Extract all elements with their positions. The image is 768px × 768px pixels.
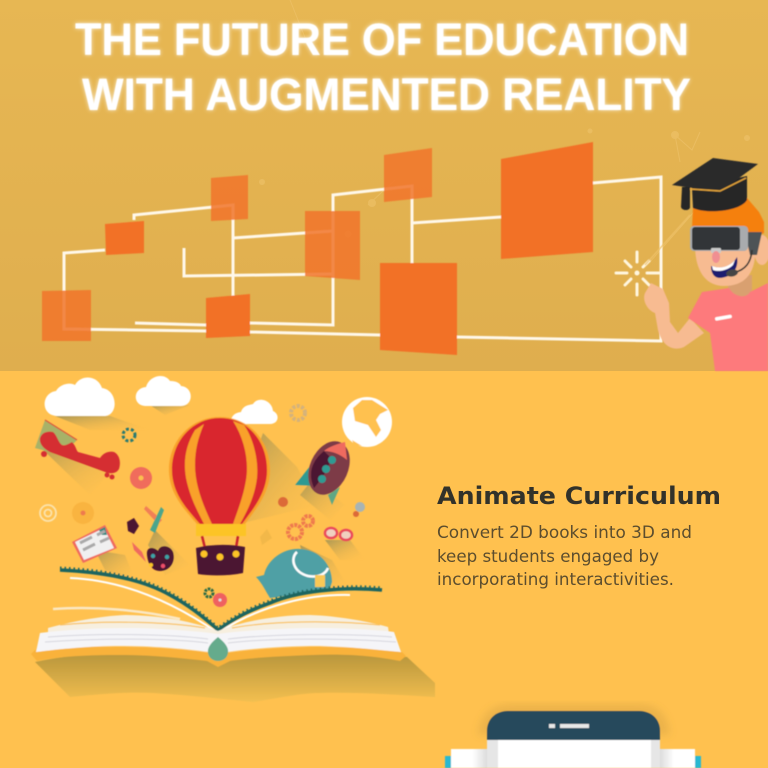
small icon: orange dot [278, 497, 288, 507]
neck [728, 275, 752, 297]
small icon: swirl [40, 505, 56, 521]
orange node: bottom left [42, 290, 91, 341]
phone shadow [478, 704, 670, 735]
orange node: centre [305, 211, 360, 280]
face [695, 245, 755, 286]
book shadow [35, 654, 435, 702]
illustration: phone and book [445, 704, 701, 768]
small icon: palette [132, 542, 174, 571]
small icon: orange dot flower [72, 502, 94, 524]
small icon: ring of dots [123, 429, 135, 441]
text block: description [437, 523, 692, 589]
headset microphone [733, 250, 752, 273]
graduation cap [672, 158, 758, 211]
small icon: orange flowers [288, 516, 313, 539]
shirt [688, 283, 768, 371]
text block: description: Convert 2D books into 3D and [437, 523, 692, 542]
flow diagram [42, 142, 661, 355]
connector lines [64, 177, 661, 341]
airplane [35, 420, 120, 480]
decorative network constellation [260, 0, 750, 262]
small icon: star [260, 529, 272, 545]
arm and hand [644, 283, 704, 349]
small icon: glasses [325, 528, 352, 540]
orange node: large top [501, 142, 593, 259]
small icon: pencil [144, 506, 164, 533]
hot air balloon [169, 417, 270, 575]
small icon: puzzle [127, 518, 139, 534]
illustration: pop-up book [31, 376, 435, 702]
hair [692, 198, 764, 238]
red flower [213, 593, 227, 607]
small icon: pink flower [130, 467, 152, 489]
small icon: blue and red dots [353, 502, 365, 517]
panel: header background [0, 0, 768, 371]
VR headset [690, 226, 748, 253]
book pages [36, 615, 401, 652]
green gear [205, 589, 213, 597]
nose [712, 251, 720, 263]
loose page [53, 608, 180, 619]
orange node: small upper left [105, 221, 144, 255]
title [75, 14, 691, 120]
panel: curriculum background [0, 371, 768, 768]
title: WITH AUGMENTED REALITY [82, 69, 691, 120]
diagonal shadows [38, 405, 365, 590]
orange node: top right of centre [384, 148, 432, 202]
ear [754, 235, 768, 265]
book pages behind phone [445, 749, 701, 768]
book cover [31, 647, 406, 667]
grass [60, 568, 382, 630]
character: student with VR headset [616, 158, 768, 371]
phone body [487, 711, 660, 768]
text block: description: keep students engaged by [437, 547, 659, 566]
clouds [45, 376, 278, 424]
rocket [295, 435, 358, 505]
globe [342, 397, 392, 447]
small icon: open book [72, 525, 117, 563]
white edge of pop-up pages [70, 578, 350, 633]
elephant [256, 549, 332, 598]
orange node: large bottom [380, 263, 457, 355]
sparkle at fingertip [616, 252, 660, 295]
book spine drop [208, 637, 228, 661]
orange node: top middle [211, 175, 248, 221]
text block: description: incorporating interactivities. [437, 570, 674, 589]
mouth [711, 257, 737, 278]
small icon: grey gear [291, 406, 305, 420]
pointer line [645, 215, 690, 265]
heading: Animate Curriculum: Animate Curriculum [437, 482, 721, 510]
title: THE FUTURE OF EDUCATION [75, 14, 689, 65]
orange node: lower middle [206, 294, 250, 338]
shirt badge [715, 314, 732, 321]
